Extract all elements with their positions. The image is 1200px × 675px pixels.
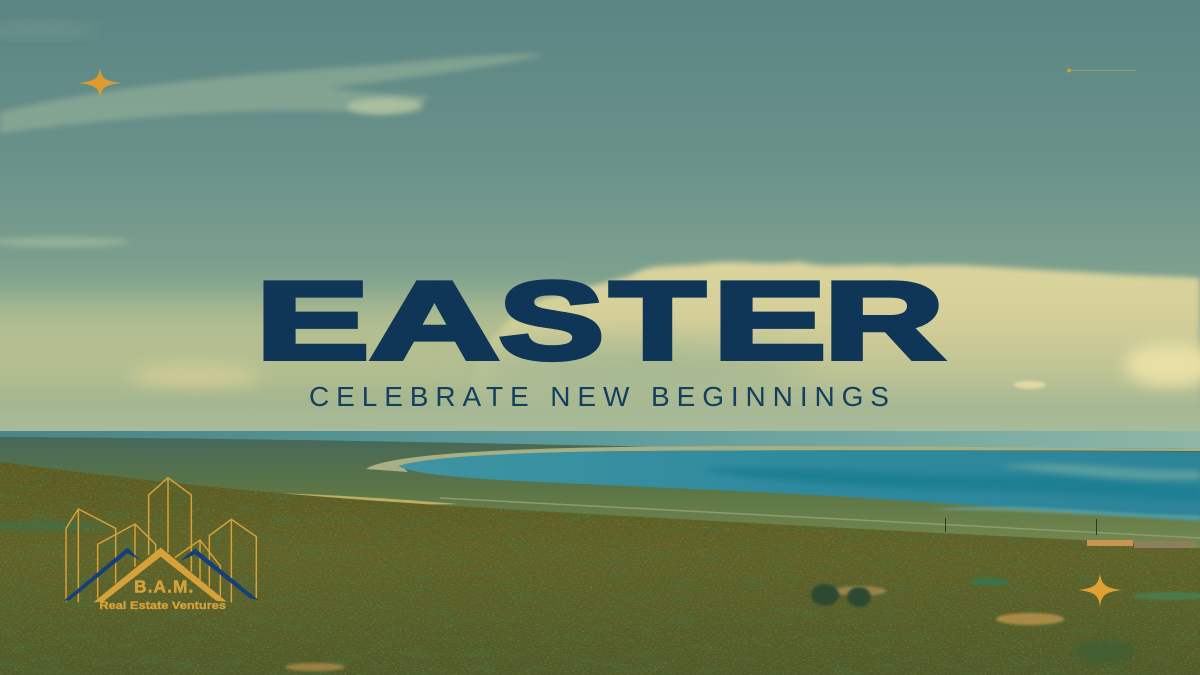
background: far water strip [0,431,1200,451]
background: sky [0,0,1200,440]
background: sand shoreline [366,446,1200,472]
title: EASTER: S [499,260,604,382]
logo: tagline: Real Estate Ventures [99,600,226,612]
background: wispy clouds top left [0,24,545,247]
logo: B.A.M. wordmark: B.A.M. [134,577,193,597]
background: foreground meadow [0,455,1200,675]
title: EASTER: R [824,260,944,382]
background: horizon haze [0,385,1200,437]
background: lake [398,450,1200,521]
shooting star: top right [1067,68,1136,72]
sparkle: bottom right [1078,573,1122,607]
title: EASTER: E [713,260,826,382]
background: cumulus cloud bank [0,262,1200,410]
background: road and fields [270,493,1200,538]
background: grassy midground [0,437,1200,552]
title: EASTER: E [256,260,369,382]
title: EASTER [256,260,944,382]
title: EASTER: A [370,260,499,382]
logo: B.A.M. Real Estate Ventures [63,478,258,612]
logo: blue roofs [63,548,258,601]
title: EASTER: T [610,260,705,382]
logo: building outlines [66,478,256,602]
building cluster on far shore [1087,540,1196,548]
subtitle: CELEBRATE NEW BEGINNINGS [309,381,889,412]
logo: gold roof [93,548,227,602]
sparkle: top left [78,68,122,98]
